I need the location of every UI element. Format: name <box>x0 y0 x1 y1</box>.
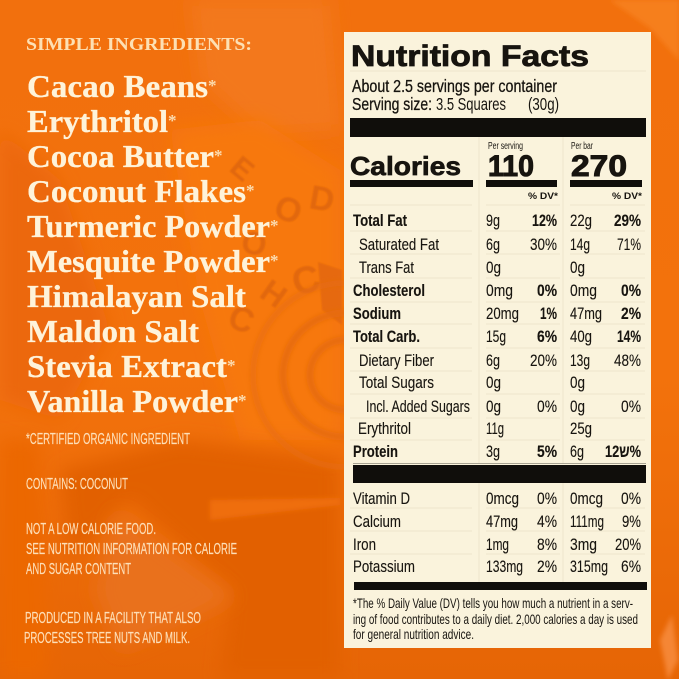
serving information: Serving size: <box>352 94 432 114</box>
nutrient table: 9g <box>486 211 500 230</box>
vitamins and minerals table: 1mg <box>486 535 509 554</box>
panel: ingredients <box>26 34 278 419</box>
vitamins and minerals table: 2% <box>537 557 557 576</box>
background: embossed chocolate logo: D <box>307 178 337 220</box>
calories row: 110 <box>488 150 534 183</box>
vitamins and minerals table <box>353 489 641 576</box>
calories row: Per bar <box>571 141 593 152</box>
ingredient list: Coconut Flakes <box>27 173 246 209</box>
heading: nutrition facts: Nutrition Facts <box>351 40 589 73</box>
vitamins and minerals table: Calcium <box>353 512 401 531</box>
nutrient table: 0% <box>537 397 557 416</box>
vitamins and minerals table: 8% <box>537 535 557 554</box>
nutrient table: 0g <box>486 397 501 416</box>
ingredient list: Mesquite Powder <box>27 243 270 279</box>
ingredient list <box>27 68 278 419</box>
nutrient table: 0g <box>570 258 585 277</box>
text block: organic note: *CERTIFIED ORGANIC INGREDIENT <box>26 431 190 448</box>
nutrient table: 0g <box>570 397 585 416</box>
vitamins and minerals table: 20% <box>615 535 641 554</box>
text block: calorie disclaimer: AND SUGAR CONTENT <box>26 561 131 578</box>
nutrient table: 0g <box>570 373 585 392</box>
nutrient table: 22g <box>570 211 592 230</box>
vitamins and minerals table: 6% <box>621 557 641 576</box>
nutrient table: 1% <box>540 304 557 323</box>
nutrient table: 6% <box>537 327 557 346</box>
nutrient table: 11g <box>486 419 504 438</box>
divider bar <box>353 465 646 483</box>
nutrient table: Cholesterol <box>353 281 425 300</box>
nutrient table: Total Fat <box>353 211 407 230</box>
calories row: Calories <box>350 151 461 181</box>
nutrient table: 0mg <box>486 281 513 300</box>
ingredient list: * <box>227 356 236 375</box>
vitamins and minerals table: 3mg <box>570 535 597 554</box>
background: embossed chocolate logo <box>223 150 342 342</box>
nutrient table: 5% <box>537 442 557 461</box>
text block: allergen: CONTAINS: COCONUT <box>26 476 128 493</box>
ingredient list: Maldon Salt <box>27 313 199 349</box>
ingredient list: Vanilla Powder <box>27 383 238 419</box>
footnote: for general nutrition advice. <box>353 626 474 642</box>
vitamins and minerals table: Vitamin D <box>353 489 410 508</box>
nutrient table: 71% <box>617 235 641 254</box>
text block: facility notice: PRODUCED IN A FACILITY THAT ALSO <box>25 610 201 627</box>
nutrient table: 20mg <box>486 304 519 323</box>
nutrient table: 30% <box>530 235 557 254</box>
background: embossed chocolate logo: O <box>239 223 270 263</box>
ingredient list: * <box>168 111 176 130</box>
divider bar <box>354 582 647 590</box>
nutrient table: 0% <box>621 281 641 300</box>
vitamins and minerals table: 315mg <box>570 557 608 576</box>
serving information: 3.5 Squares <box>436 94 506 114</box>
nutrient table: Incl. Added Sugars <box>366 397 470 416</box>
ingredient list: * <box>246 181 254 200</box>
ingredient list: * <box>270 251 278 270</box>
calories row: % DV* <box>612 191 643 201</box>
nutrient table: 0g <box>486 258 501 277</box>
vitamins and minerals table: 0mcg <box>570 489 603 508</box>
calories row: Per serving <box>488 141 523 152</box>
text block: calorie disclaimer: SEE NUTRITION INFORMATION FOR CALORIE <box>26 541 237 558</box>
nutrient table: 2% <box>621 304 641 323</box>
ingredient list: * <box>238 391 246 410</box>
nutrient table: 20% <box>530 351 557 370</box>
background: embossed chocolate logo: O <box>269 188 307 233</box>
background: embossed chocolate logo: C <box>287 257 325 305</box>
nutrient table: 0% <box>621 397 641 416</box>
text block: calorie disclaimer: NOT A LOW CALORIE FOOD. <box>26 521 156 538</box>
calories row: 270 <box>571 150 627 183</box>
nutrient table: 6g <box>570 442 584 461</box>
vitamins and minerals table: 47mg <box>486 512 518 531</box>
nutrient table: 0mg <box>570 281 597 300</box>
nutrient table: 6g <box>486 235 500 254</box>
ingredient list: Cocoa Butter <box>27 138 214 174</box>
text block: facility notice: PROCESSES TREE NUTS AND MILK. <box>24 630 190 647</box>
background: embossed chocolate logo: C <box>223 298 259 342</box>
serving information <box>352 76 559 114</box>
nutrient table: Saturated Fat <box>359 235 439 254</box>
nutrient table: 3g <box>486 442 500 461</box>
nutrient table: Total Carb. <box>353 327 420 346</box>
background: embossed chocolate logo: E <box>224 150 260 188</box>
nutrient table: 13g <box>570 351 590 370</box>
panel: nutrition facts <box>344 32 651 648</box>
vitamins and minerals table: 0% <box>621 489 641 508</box>
nutrient table: 15g <box>486 327 506 346</box>
nutrient table: Total Sugars <box>359 373 434 392</box>
nutrient table <box>353 211 641 461</box>
nutrient table: 14% <box>617 327 641 346</box>
background: embossed chocolate logo: H <box>254 272 294 315</box>
nutrient table: 29% <box>614 211 641 230</box>
nutrient table: 14g <box>570 235 590 254</box>
ingredient list: Cacao Beans <box>27 68 208 104</box>
ingredient list: Himalayan Salt <box>27 278 246 314</box>
vitamins and minerals table: 9% <box>622 512 641 531</box>
text block: facility notice <box>24 610 201 647</box>
nutrient table: Dietary Fiber <box>359 351 434 370</box>
nutrient table: 6g <box>486 351 500 370</box>
ingredient list: Erythritol <box>27 103 168 139</box>
vitamins and minerals table: 111mg <box>570 512 604 531</box>
nutrient table: 47mg <box>570 304 602 323</box>
ingredient list: * <box>214 146 222 165</box>
vitamins and minerals table: 133mg <box>486 557 523 576</box>
footnote <box>353 595 638 642</box>
ingredient list: * <box>208 76 216 95</box>
vitamins and minerals table: 0% <box>537 489 557 508</box>
nutrient table: Erythritol <box>358 419 411 438</box>
ingredient list: * <box>270 216 278 235</box>
vitamins and minerals table: 4% <box>537 512 557 531</box>
calories row <box>350 141 643 201</box>
nutrient table: 12% <box>532 211 557 230</box>
nutrient table: 48% <box>614 351 641 370</box>
nutrient table: Protein <box>353 442 398 461</box>
nutrient table: 0g <box>486 373 501 392</box>
text block: calorie disclaimer <box>26 521 237 578</box>
divider bar <box>350 118 646 137</box>
nutrient table: Trans Fat <box>359 258 414 277</box>
heading: simple ingredients: SIMPLE INGREDIENTS: <box>26 34 252 54</box>
nutrient table: 25g <box>570 419 592 438</box>
vitamins and minerals table: 0mcg <box>486 489 519 508</box>
nutrient table: 0% <box>537 281 557 300</box>
nutrient table: 12ש% <box>605 442 641 461</box>
calories row: % DV* <box>528 191 559 201</box>
vitamins and minerals table: Potassium <box>353 557 415 576</box>
serving information: About 2.5 servings per container <box>352 76 557 96</box>
vitamins and minerals table: Iron <box>353 535 376 554</box>
ingredient list: Turmeric Powder <box>27 208 270 244</box>
nutrient table: 40g <box>570 327 592 346</box>
nutrient table: Sodium <box>353 304 401 323</box>
serving information: (30g) <box>528 94 559 114</box>
ingredient list: Stevia Extract <box>27 348 227 384</box>
